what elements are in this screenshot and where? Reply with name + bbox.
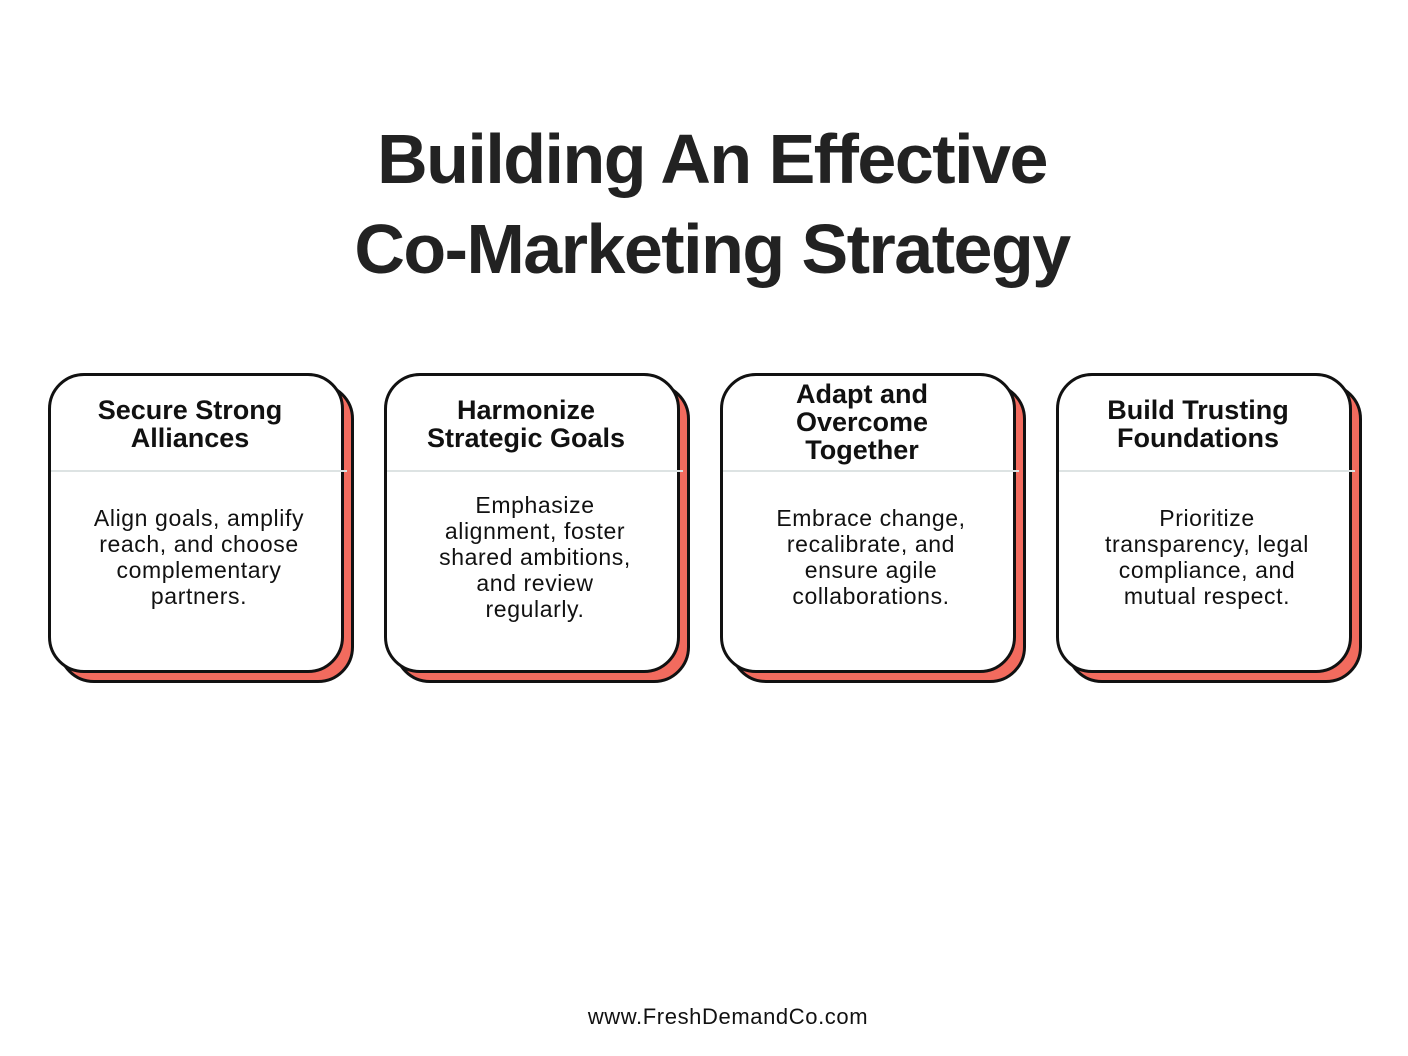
card title: Overcome bbox=[796, 407, 928, 437]
card body: ensure agile bbox=[805, 557, 937, 583]
card title bbox=[427, 395, 625, 453]
footer url: www.FreshDemandCo.com bbox=[588, 1004, 868, 1029]
card body: transparency, legal bbox=[1105, 531, 1309, 557]
card: build trusting foundations bbox=[1056, 373, 1362, 683]
card body: and review bbox=[476, 570, 594, 596]
card: secure strong alliances bbox=[48, 373, 354, 683]
card title: Foundations bbox=[1117, 423, 1279, 453]
card body: shared ambitions, bbox=[439, 544, 631, 570]
card body: mutual respect. bbox=[1124, 583, 1290, 609]
card title: Harmonize bbox=[457, 395, 595, 425]
card title: Adapt and bbox=[796, 379, 928, 409]
card body: complementary bbox=[116, 557, 282, 583]
card body: compliance, and bbox=[1119, 557, 1295, 583]
card body: Emphasize bbox=[475, 492, 595, 518]
card: adapt and overcome together bbox=[720, 373, 1026, 683]
card body bbox=[1105, 505, 1309, 609]
card title: Secure Strong bbox=[98, 395, 282, 425]
card body bbox=[94, 505, 304, 609]
card body: partners. bbox=[151, 583, 247, 609]
card title: Alliances bbox=[131, 423, 249, 453]
card body: Align goals, amplify bbox=[94, 505, 304, 531]
card title: Together bbox=[805, 435, 919, 465]
card body bbox=[439, 492, 631, 622]
card title bbox=[796, 379, 928, 465]
card title bbox=[1107, 395, 1289, 453]
card body: collaborations. bbox=[792, 583, 950, 609]
card body: recalibrate, and bbox=[787, 531, 955, 557]
card title: Build Trusting bbox=[1107, 395, 1289, 425]
card title: Strategic Goals bbox=[427, 423, 625, 453]
card body: regularly. bbox=[486, 596, 584, 622]
card body bbox=[776, 505, 966, 609]
card body: reach, and choose bbox=[99, 531, 299, 557]
card title bbox=[98, 395, 282, 453]
card: harmonize strategic goals bbox=[384, 373, 690, 683]
title: Building An Effective bbox=[377, 120, 1047, 198]
card body: Embrace change, bbox=[776, 505, 966, 531]
card body: alignment, foster bbox=[445, 518, 625, 544]
title bbox=[354, 120, 1071, 288]
card body: Prioritize bbox=[1159, 505, 1255, 531]
title: Co-Marketing Strategy bbox=[354, 210, 1070, 288]
